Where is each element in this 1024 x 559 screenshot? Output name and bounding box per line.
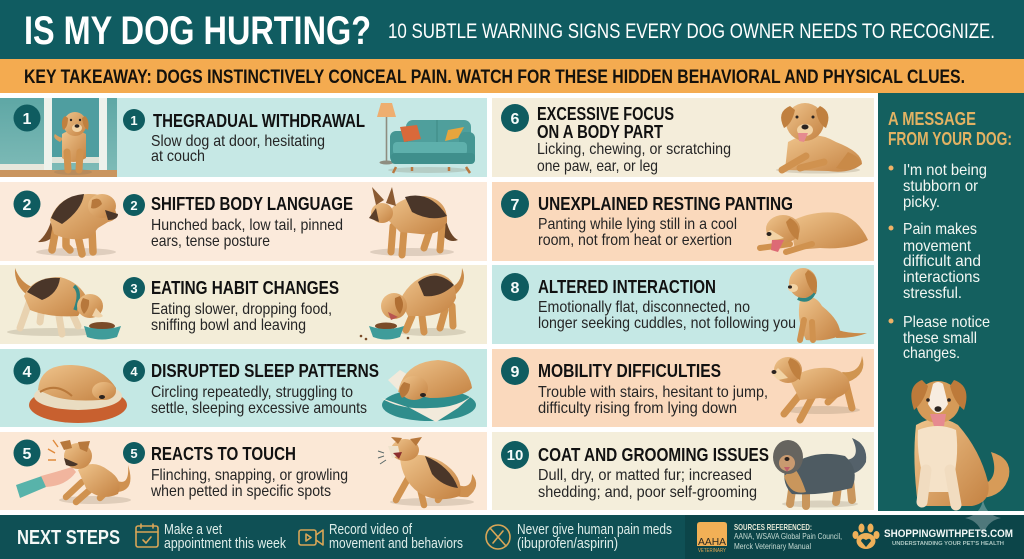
panel: sign 6 excessive focus on a body part — [492, 98, 874, 177]
description: Dull, dry, or matted fur; increased — [538, 467, 752, 484]
number badge 3 — [123, 277, 145, 299]
heading: THEGRADUAL WITHDRAWAL — [153, 110, 365, 131]
illustration: growling dog — [378, 437, 476, 506]
panel: sign 10 coat and grooming issues — [492, 432, 874, 510]
description: Slow dog at door, hesitating — [151, 133, 325, 150]
step: record — [329, 522, 463, 552]
bullet 2: difficult and — [903, 253, 981, 270]
step: vet — [164, 522, 287, 552]
description: ears, tense posture — [151, 233, 270, 250]
heading: EATING HABIT CHANGES — [151, 277, 339, 298]
number badge 9: 9 — [511, 364, 520, 381]
number badge 5 small — [123, 442, 145, 464]
logo: AAHA: AAHA — [698, 536, 726, 548]
description — [150, 467, 348, 500]
step: no human meds: Never give human pain meds — [517, 522, 672, 538]
illustration: dog on teal bed with blanket — [381, 360, 476, 422]
description: Panting while lying still in a cool — [538, 216, 737, 233]
heading: DISRUPTED SLEEP PATTERNS — [151, 360, 379, 381]
illustration: dog curled on orange bed — [29, 365, 127, 423]
description: Flinching, snapping, or growling — [151, 467, 348, 484]
description — [151, 301, 332, 334]
heading: EXCESSIVE FOCUS — [537, 103, 674, 124]
number badge 4 small: 4 — [130, 364, 138, 379]
illustration: dog leaving food bowl — [360, 268, 466, 340]
step: no human meds — [517, 522, 672, 552]
heading: ON A BODY PART — [537, 121, 664, 142]
description: sniffing bowl and leaving — [151, 317, 306, 334]
header banner — [0, 0, 1024, 59]
panel: sign 1 gradual withdrawal — [0, 98, 487, 177]
number badge 2 small — [123, 194, 145, 216]
description — [538, 384, 768, 417]
heading: ALTERED INTERACTION — [538, 276, 716, 297]
description: one paw, ear, or leg — [537, 158, 658, 175]
description: when petted in specific spots — [150, 483, 331, 500]
illustration: lab panting on floor — [760, 212, 868, 252]
number badge 4 small — [123, 360, 145, 382]
description: difficulty rising from lying down — [538, 400, 737, 417]
logo: AAHA — [697, 522, 727, 554]
panel: a message from your dog — [878, 93, 1024, 511]
step: record: movement and behaviors — [329, 536, 463, 552]
description — [538, 299, 796, 332]
sidebar heading — [888, 109, 1012, 149]
description — [537, 141, 731, 175]
step: vet: appointment this week — [164, 536, 287, 552]
sidebar heading: A MESSAGE — [888, 109, 976, 129]
step: vet: Make a vet — [164, 522, 222, 538]
description — [538, 216, 737, 249]
footer: next steps — [0, 515, 1024, 559]
bullet 2 — [888, 221, 981, 302]
panel: sign 3 eating habit changes — [0, 265, 487, 344]
description: settle, sleeping excessive amounts — [151, 400, 367, 417]
title: IS MY DOG HURTING? — [24, 9, 371, 53]
number badge 5 — [14, 440, 40, 466]
panel: sign 7 unexplained resting panting — [492, 182, 874, 261]
bullet 2: movement — [903, 238, 971, 255]
description: at couch — [151, 148, 205, 165]
description: Hunched back, low tail, pinned — [151, 217, 343, 234]
heading: MOBILITY DIFFICULTIES — [538, 360, 721, 381]
bullet 1: picky. — [903, 194, 940, 211]
illustration: german shepherd — [369, 187, 458, 256]
number badge 8: 8 — [511, 280, 520, 297]
step: no human meds: (ibuprofen/aspirin) — [517, 536, 618, 552]
number badge 2 small: 2 — [130, 198, 138, 213]
heading: COAT AND GROOMING ISSUES — [538, 444, 769, 465]
number badge 8 — [501, 273, 529, 301]
logo: AAHA: VETERINARY — [698, 548, 727, 554]
number badge 9 — [501, 357, 529, 385]
bullet 3: these small — [903, 330, 977, 347]
number badge 7 — [501, 190, 529, 218]
number badge 5 small: 5 — [130, 446, 138, 461]
description: room, not from heat or exertion — [538, 232, 732, 249]
number badge 2: 2 — [23, 197, 32, 214]
panel: sign 8 altered interaction — [492, 265, 874, 344]
number badge 1 small: 1 — [130, 113, 138, 128]
heading: NEXT STEPS — [17, 527, 120, 549]
heading: REACTS TO TOUCH — [151, 443, 296, 464]
description — [151, 217, 343, 250]
panel: sign 5 reacts to touch — [0, 432, 487, 510]
description: Circling repeatedly, struggling to — [151, 384, 353, 401]
bullet 3: changes. — [903, 345, 960, 362]
description: Eating slower, dropping food, — [151, 301, 332, 318]
sources: SOURCES REFERENCED: — [734, 522, 812, 532]
bullet 1 — [888, 162, 987, 211]
number badge 10: 10 — [507, 447, 523, 464]
number badge 1: 1 — [23, 111, 32, 128]
icon: calendar — [136, 524, 158, 547]
description: Trouble with stairs, hesitant to jump, — [538, 384, 768, 401]
number badge 6: 6 — [511, 111, 520, 128]
number badge 1 — [14, 104, 40, 132]
number badge 10 — [501, 441, 529, 469]
illustration: sitting withdrawn dog — [788, 268, 867, 340]
panel: sign 4 disrupted sleep patterns — [0, 349, 487, 427]
panel: sign 2 shifted body language — [0, 182, 487, 261]
number badge 6 — [501, 104, 529, 132]
bullet 2: stressful. — [903, 285, 962, 302]
icon: video camera — [299, 530, 323, 545]
bullet 2: interactions — [903, 269, 980, 286]
sources: Merck Veterinary Manual — [734, 541, 811, 551]
step: record: Record video of — [329, 522, 413, 538]
sources — [734, 522, 842, 551]
heading — [537, 103, 674, 142]
illustration: stiff walking lab — [772, 356, 863, 420]
number badge 5: 5 — [23, 446, 32, 463]
number badge 7: 7 — [511, 197, 520, 214]
illustration: dog sniffing bowl — [7, 268, 121, 340]
description — [151, 133, 325, 165]
illustration: hand touching flinching dog — [16, 440, 131, 504]
sources: AANA, WSAVA Global Pain Council, — [734, 531, 842, 541]
number badge 1 small — [123, 109, 145, 131]
brand: UNDERSTANDING YOUR PET'S HEALTH — [892, 541, 1004, 547]
bullet 2: Pain makes — [903, 221, 977, 238]
bullet 1: stubborn or — [903, 178, 979, 195]
panel: sign 9 mobility difficulties — [492, 349, 874, 427]
brand — [884, 528, 1013, 547]
description — [538, 467, 757, 501]
bullet 3 — [888, 314, 990, 362]
description: Licking, chewing, or scratching — [537, 141, 731, 158]
icon: no pills — [486, 525, 510, 549]
number badge 3: 3 — [130, 281, 138, 296]
heading: SHIFTED BODY LANGUAGE — [151, 193, 353, 214]
illustration: shaggy dog — [773, 438, 866, 508]
illustration: dog at door — [0, 98, 117, 177]
icon: paw — [852, 524, 880, 549]
illustration: hunched dog — [36, 194, 118, 256]
description — [151, 384, 367, 417]
heading: UNEXPLAINED RESTING PANTING — [538, 193, 793, 214]
bullet 1: I'm not being — [903, 162, 987, 179]
illustration: lab licking paw — [776, 103, 862, 174]
bullet 3: Please notice — [903, 314, 990, 331]
number badge 4: 4 — [23, 364, 32, 381]
illustration: lamp and couch — [377, 103, 475, 173]
illustration: happy sitting dog — [911, 380, 1009, 506]
description: shedding; and, poor self-grooming — [538, 484, 757, 501]
description: Emotionally flat, disconnected, no — [538, 299, 750, 316]
key takeaway bar — [0, 59, 1024, 93]
number badge 2 — [14, 190, 40, 218]
number badge 4 — [14, 358, 40, 384]
description: longer seeking cuddles, not following you — [538, 315, 796, 332]
brand: SHOPPINGWITHPETS.COM — [884, 528, 1013, 540]
